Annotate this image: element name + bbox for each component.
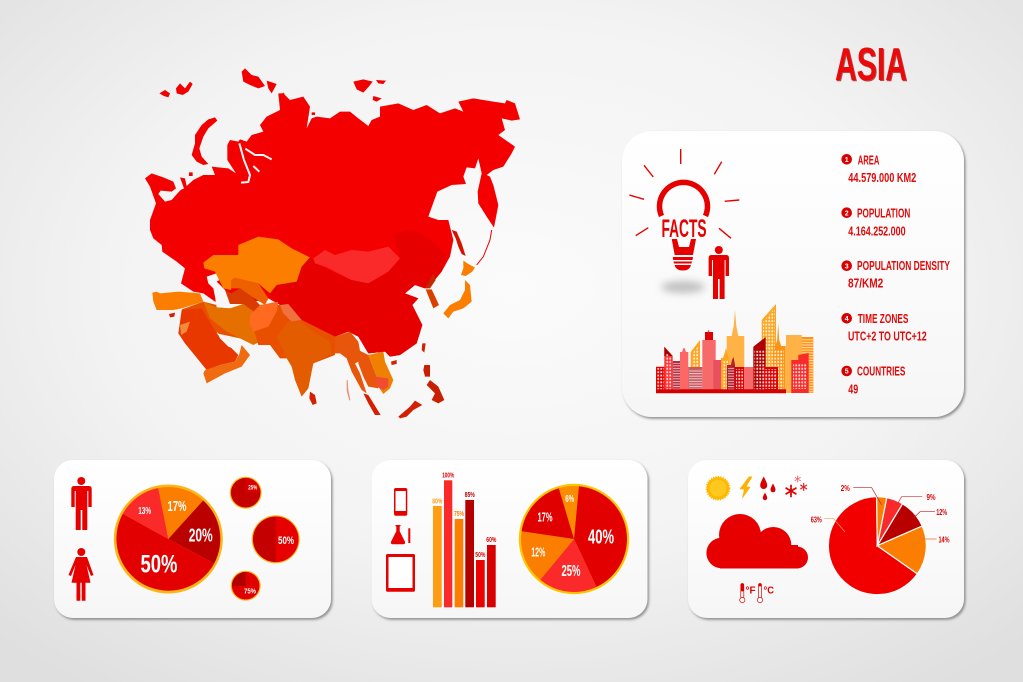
map: Ob and Yenisei gulfs	[239, 143, 272, 183]
map: Novaya Zemlya	[192, 117, 217, 165]
icon: male	[71, 477, 92, 530]
pie chart: technology shares: 40%	[588, 526, 614, 548]
panel: weather	[688, 460, 964, 618]
map: Turkey	[152, 292, 203, 310]
bar chart: 85%	[465, 492, 475, 499]
title text: ASIA	[835, 38, 907, 90]
map: Kashmir	[280, 304, 302, 322]
icon: rain drops	[760, 476, 776, 500]
map: Andaman islands	[347, 380, 350, 401]
technology panel background	[372, 460, 648, 618]
map: Kazakhstan	[203, 237, 310, 293]
map: Sri Lanka	[309, 392, 317, 405]
map: Persian Gulf	[217, 332, 242, 349]
skyline base	[656, 389, 786, 393]
bar chart	[432, 472, 497, 607]
pie labels: 63%	[811, 516, 822, 524]
map: Hainan	[391, 360, 397, 365]
fact: population: 2	[845, 210, 849, 217]
bulb base	[672, 239, 696, 270]
icon: tablet	[386, 554, 415, 592]
fact: area: 1	[845, 157, 849, 164]
map: China and Manchuria	[270, 230, 447, 357]
map: Borneo	[398, 401, 422, 418]
bar chart: 80%	[432, 498, 443, 506]
pie chart: technology shares: 25%	[562, 563, 581, 580]
fact: time zones: UTC+2 TO UTC+12	[848, 329, 927, 344]
map: Uzbekistan	[231, 278, 268, 305]
fact: area: AREA	[858, 152, 880, 167]
pie labels: 9%	[926, 493, 936, 502]
icon: cloud	[706, 514, 808, 568]
fact: population density: 87/KM2	[848, 276, 883, 291]
orange back buildings	[762, 304, 776, 393]
pie chart: gender shares: 17%	[168, 499, 187, 515]
panel: technology	[372, 460, 648, 618]
fact: time zones	[841, 311, 927, 344]
fact: population density: 3	[845, 263, 849, 270]
map: western Asia countries	[152, 237, 332, 405]
map: Kuril chain	[477, 230, 492, 265]
map: Sakhalin	[452, 230, 466, 256]
thermometer fahrenheit: °F	[746, 585, 756, 596]
map: Philippines	[423, 365, 444, 403]
pie chart: 25 percent	[230, 477, 262, 509]
icon: smartphone	[394, 488, 407, 516]
map: Hokkaido	[461, 261, 475, 276]
bulb facts word: FACTS	[662, 215, 706, 243]
fact: time zones: TIME ZONES	[858, 311, 909, 326]
pie chart: technology shares: 6%	[565, 494, 574, 505]
pie chart: 75 percent: 75%	[244, 586, 256, 596]
fact: population: 4.164.252.000	[848, 223, 906, 238]
facts list	[841, 152, 950, 396]
map: Turkmenistan	[225, 288, 260, 312]
fact: population density: POPULATION DENSITY	[857, 258, 950, 273]
icon: city skyline	[656, 304, 813, 393]
fact: area	[841, 152, 916, 185]
pie chart: gender shares	[114, 484, 223, 594]
bar chart: 100%	[442, 472, 455, 480]
map: Cambodia	[375, 377, 388, 390]
map: Iran	[203, 302, 260, 345]
map: Yemen and Oman	[203, 345, 250, 383]
map: eastern arctic islands	[353, 79, 386, 102]
pie chart: gender shares: 13%	[138, 505, 152, 517]
fact: population: POPULATION	[857, 205, 910, 220]
pie chart: gender shares: 50%	[140, 550, 178, 578]
map: South Korea	[426, 289, 439, 308]
map of Asia	[145, 68, 520, 418]
pie labels: 12%	[936, 508, 947, 517]
title	[835, 38, 908, 91]
icon: snowflakes	[786, 476, 807, 496]
bar chart: 50%	[475, 552, 486, 559]
map: India	[277, 322, 332, 397]
icon: light bulb with facts	[629, 149, 739, 293]
icon: lightning	[740, 476, 752, 499]
icon: flask	[391, 525, 410, 544]
fact: countries: 5	[845, 369, 849, 376]
map: Arabian Peninsula	[178, 308, 238, 370]
map: eastern Asia countries	[335, 230, 492, 418]
pie chart: 75 percent	[231, 571, 261, 601]
gender panel background	[54, 460, 331, 618]
fact: time zones: 4	[845, 316, 849, 323]
map: Malaysia	[363, 393, 381, 415]
thermometer celsius: °C	[764, 585, 774, 596]
pie labels: 2%	[841, 484, 850, 493]
bar chart: 75%	[454, 511, 465, 518]
map: south Asia underlay	[182, 302, 335, 363]
map: Thailand and Laos	[358, 350, 378, 388]
map: Honshu	[443, 280, 472, 318]
pie chart: technology shares: 17%	[538, 510, 552, 524]
back building windows	[692, 308, 784, 393]
weather panel background	[688, 460, 964, 618]
pie chart: weather shares	[828, 497, 926, 595]
bulb shadow	[661, 281, 705, 293]
pie labels: 14%	[938, 536, 950, 544]
bulb rays	[629, 149, 739, 238]
red front buildings	[656, 367, 665, 393]
icon: thermometers	[740, 584, 774, 603]
front building windows	[657, 350, 807, 390]
pie chart: 50 percent: 50%	[278, 535, 294, 547]
map: Afghanistan	[250, 302, 278, 332]
icon: person	[709, 246, 729, 299]
map: Taiwan	[422, 343, 426, 353]
icon: female	[68, 548, 94, 601]
map: Cyprus	[169, 313, 175, 317]
map: Vietnam	[368, 352, 393, 394]
pie chart: technology shares	[519, 484, 629, 594]
map: Russia and north Asia landmass	[145, 93, 520, 357]
title shadow: ASIA	[836, 39, 908, 91]
map: western arctic islands	[159, 68, 315, 176]
bar chart: 60%	[486, 537, 497, 544]
pie chart: technology shares: 12%	[531, 546, 545, 560]
pie chart: 50 percent	[252, 515, 300, 563]
fact: area: 44.579.000 KM2	[848, 170, 916, 185]
map: North Korea	[425, 273, 436, 288]
bulb outline	[660, 182, 707, 216]
pie chart: gender shares: 20%	[189, 526, 213, 546]
pie leader lines	[824, 488, 937, 547]
fact: population	[841, 205, 910, 238]
facts panel background	[622, 131, 964, 417]
panel: gender	[54, 460, 331, 618]
icon: sun	[707, 477, 729, 500]
pie labels	[811, 484, 950, 544]
fact: countries	[841, 364, 906, 396]
map: Pakistan	[255, 310, 288, 358]
fact: countries: COUNTRIES	[857, 364, 906, 379]
map: Levant	[180, 322, 190, 335]
map: Myanmar	[335, 332, 367, 393]
panel: facts	[622, 131, 964, 417]
pie chart: 25 percent: 25%	[248, 484, 257, 492]
map: Mongolia	[313, 247, 400, 283]
fact: population density	[841, 258, 950, 291]
map: Caspian Sea	[207, 272, 230, 308]
fact: countries: 49	[848, 381, 858, 396]
